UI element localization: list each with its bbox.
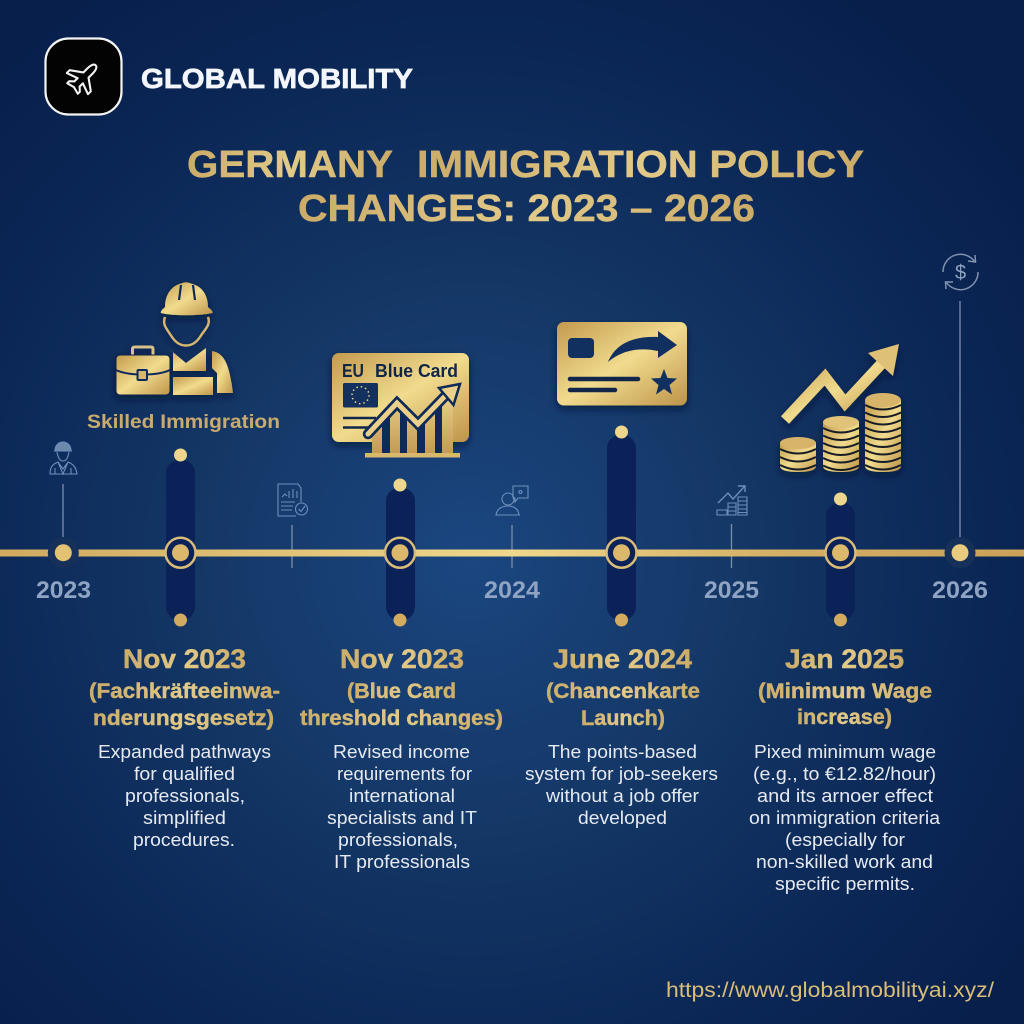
column: Jan 2025: increase) <box>797 706 892 729</box>
column: Jan 2025: non-skilled work and <box>756 851 933 872</box>
rising arrow <box>785 361 884 420</box>
column: Nov 2023 skilled immigration: simplified <box>143 807 226 828</box>
curved arrow <box>608 331 677 362</box>
column: Nov 2023 blue card: threshold changes) <box>300 707 503 730</box>
icon: dollar cycle: $ <box>955 262 966 284</box>
column: June 2024: developed <box>578 807 667 828</box>
year labels: 2025 <box>704 577 759 604</box>
column: Nov 2023 blue card: requirements for <box>337 763 472 784</box>
year labels: 2023 <box>36 577 91 604</box>
column: Nov 2023 blue card: specialists and IT <box>327 807 477 828</box>
column: Nov 2023 skilled immigration: Expanded pathways <box>98 741 271 762</box>
milestone node: Jan 2025 <box>826 492 856 626</box>
icon: coins and rising arrow <box>780 344 901 472</box>
brand name: GLOBAL MOBILITY <box>141 63 413 94</box>
card label: EU <box>342 360 364 381</box>
column: Nov 2023 blue card: (Blue Card <box>347 680 456 703</box>
column: Jan 2025: on immigration criteria <box>749 807 941 828</box>
node: 2023 <box>48 537 79 568</box>
rising bar chart <box>365 384 460 458</box>
year labels: 2026 <box>932 577 988 604</box>
column: June 2024 <box>525 644 718 828</box>
column: Jan 2025 <box>749 644 941 894</box>
column: Jan 2025: and its arnoer effect <box>757 785 933 806</box>
card label <box>342 360 458 381</box>
coin stack tall <box>865 393 901 472</box>
column: Jan 2025: (e.g., to €12.82/hour) <box>753 763 936 784</box>
icon: small chart with coins <box>717 486 747 515</box>
card label: Blue Card <box>375 360 458 381</box>
icon: dollar cycle <box>943 254 978 290</box>
column: Nov 2023 blue card: professionals, <box>338 829 458 850</box>
EU flag <box>343 383 378 408</box>
coin stack small <box>780 437 816 472</box>
label: Skilled Immigration: Skilled Immigration <box>87 411 280 433</box>
timeline axis <box>0 550 1024 556</box>
column: Jan 2025: (Minimum Wage <box>758 680 932 703</box>
title: CHANGES: 2023 – 2026 <box>298 188 755 230</box>
year labels: 2024 <box>484 577 541 604</box>
column: June 2024: system for job-seekers <box>525 763 718 784</box>
coin stack medium <box>823 416 859 472</box>
year labels <box>36 577 988 604</box>
icon: Chancenkarte card <box>557 322 687 406</box>
column: Nov 2023 skilled immigration: procedures. <box>133 829 235 850</box>
title <box>187 144 864 230</box>
column: Nov 2023 skilled immigration <box>89 644 280 850</box>
column: June 2024: without a job offer <box>545 785 699 806</box>
milestone node: Nov 2023 blue card <box>385 478 415 626</box>
column: June 2024: (Chancenkarte <box>546 680 700 703</box>
column: Nov 2023 skilled immigration: for qualified <box>134 763 235 784</box>
column: Jan 2025: Pixed minimum wage <box>754 741 936 762</box>
timeline pills <box>166 435 855 620</box>
minor tick lines <box>63 301 960 568</box>
icon: EU Blue Card <box>332 353 469 458</box>
column: Nov 2023 blue card: international <box>349 785 455 806</box>
column: June 2024: June 2024 <box>553 644 692 674</box>
milestone node: June 2024 <box>606 426 636 626</box>
icon: small person with speech bubble <box>496 486 528 515</box>
column: Nov 2023 skilled immigration: Nov 2023 <box>123 644 246 674</box>
column: Nov 2023 skilled immigration: (Fachkräfteeinwa- <box>89 680 280 703</box>
column: June 2024: The points-based <box>548 741 697 762</box>
website URL: https://www.globalmobilityai.xyz/ <box>666 979 994 1002</box>
title: GERMANY <box>187 144 393 186</box>
logo badge <box>46 38 122 114</box>
column: Nov 2023 blue card <box>300 644 503 872</box>
title: IMMIGRATION POLICY <box>417 144 864 186</box>
column: Jan 2025: (especially for <box>785 829 905 850</box>
column: Nov 2023 blue card: IT professionals <box>334 851 470 872</box>
column: Jan 2025: specific permits. <box>775 873 915 894</box>
star <box>651 369 677 394</box>
column: Nov 2023 blue card: Nov 2023 <box>340 644 464 674</box>
column: Nov 2023 blue card: Revised income <box>333 741 470 762</box>
icon: airplane <box>62 55 106 99</box>
column: June 2024: Launch) <box>581 707 665 730</box>
column: Nov 2023 skilled immigration: professionals, <box>125 785 245 806</box>
icon: small document with chart <box>278 484 308 516</box>
column: Jan 2025: Jan 2025 <box>785 644 904 674</box>
icon: skilled worker with briefcase <box>116 282 233 395</box>
node: 2026 <box>944 537 976 568</box>
icon: small worker <box>50 442 77 474</box>
column: Nov 2023 skilled immigration: nderungsgesetz) <box>93 707 274 730</box>
milestone node: Nov 2023 skilled immigration <box>166 448 196 626</box>
